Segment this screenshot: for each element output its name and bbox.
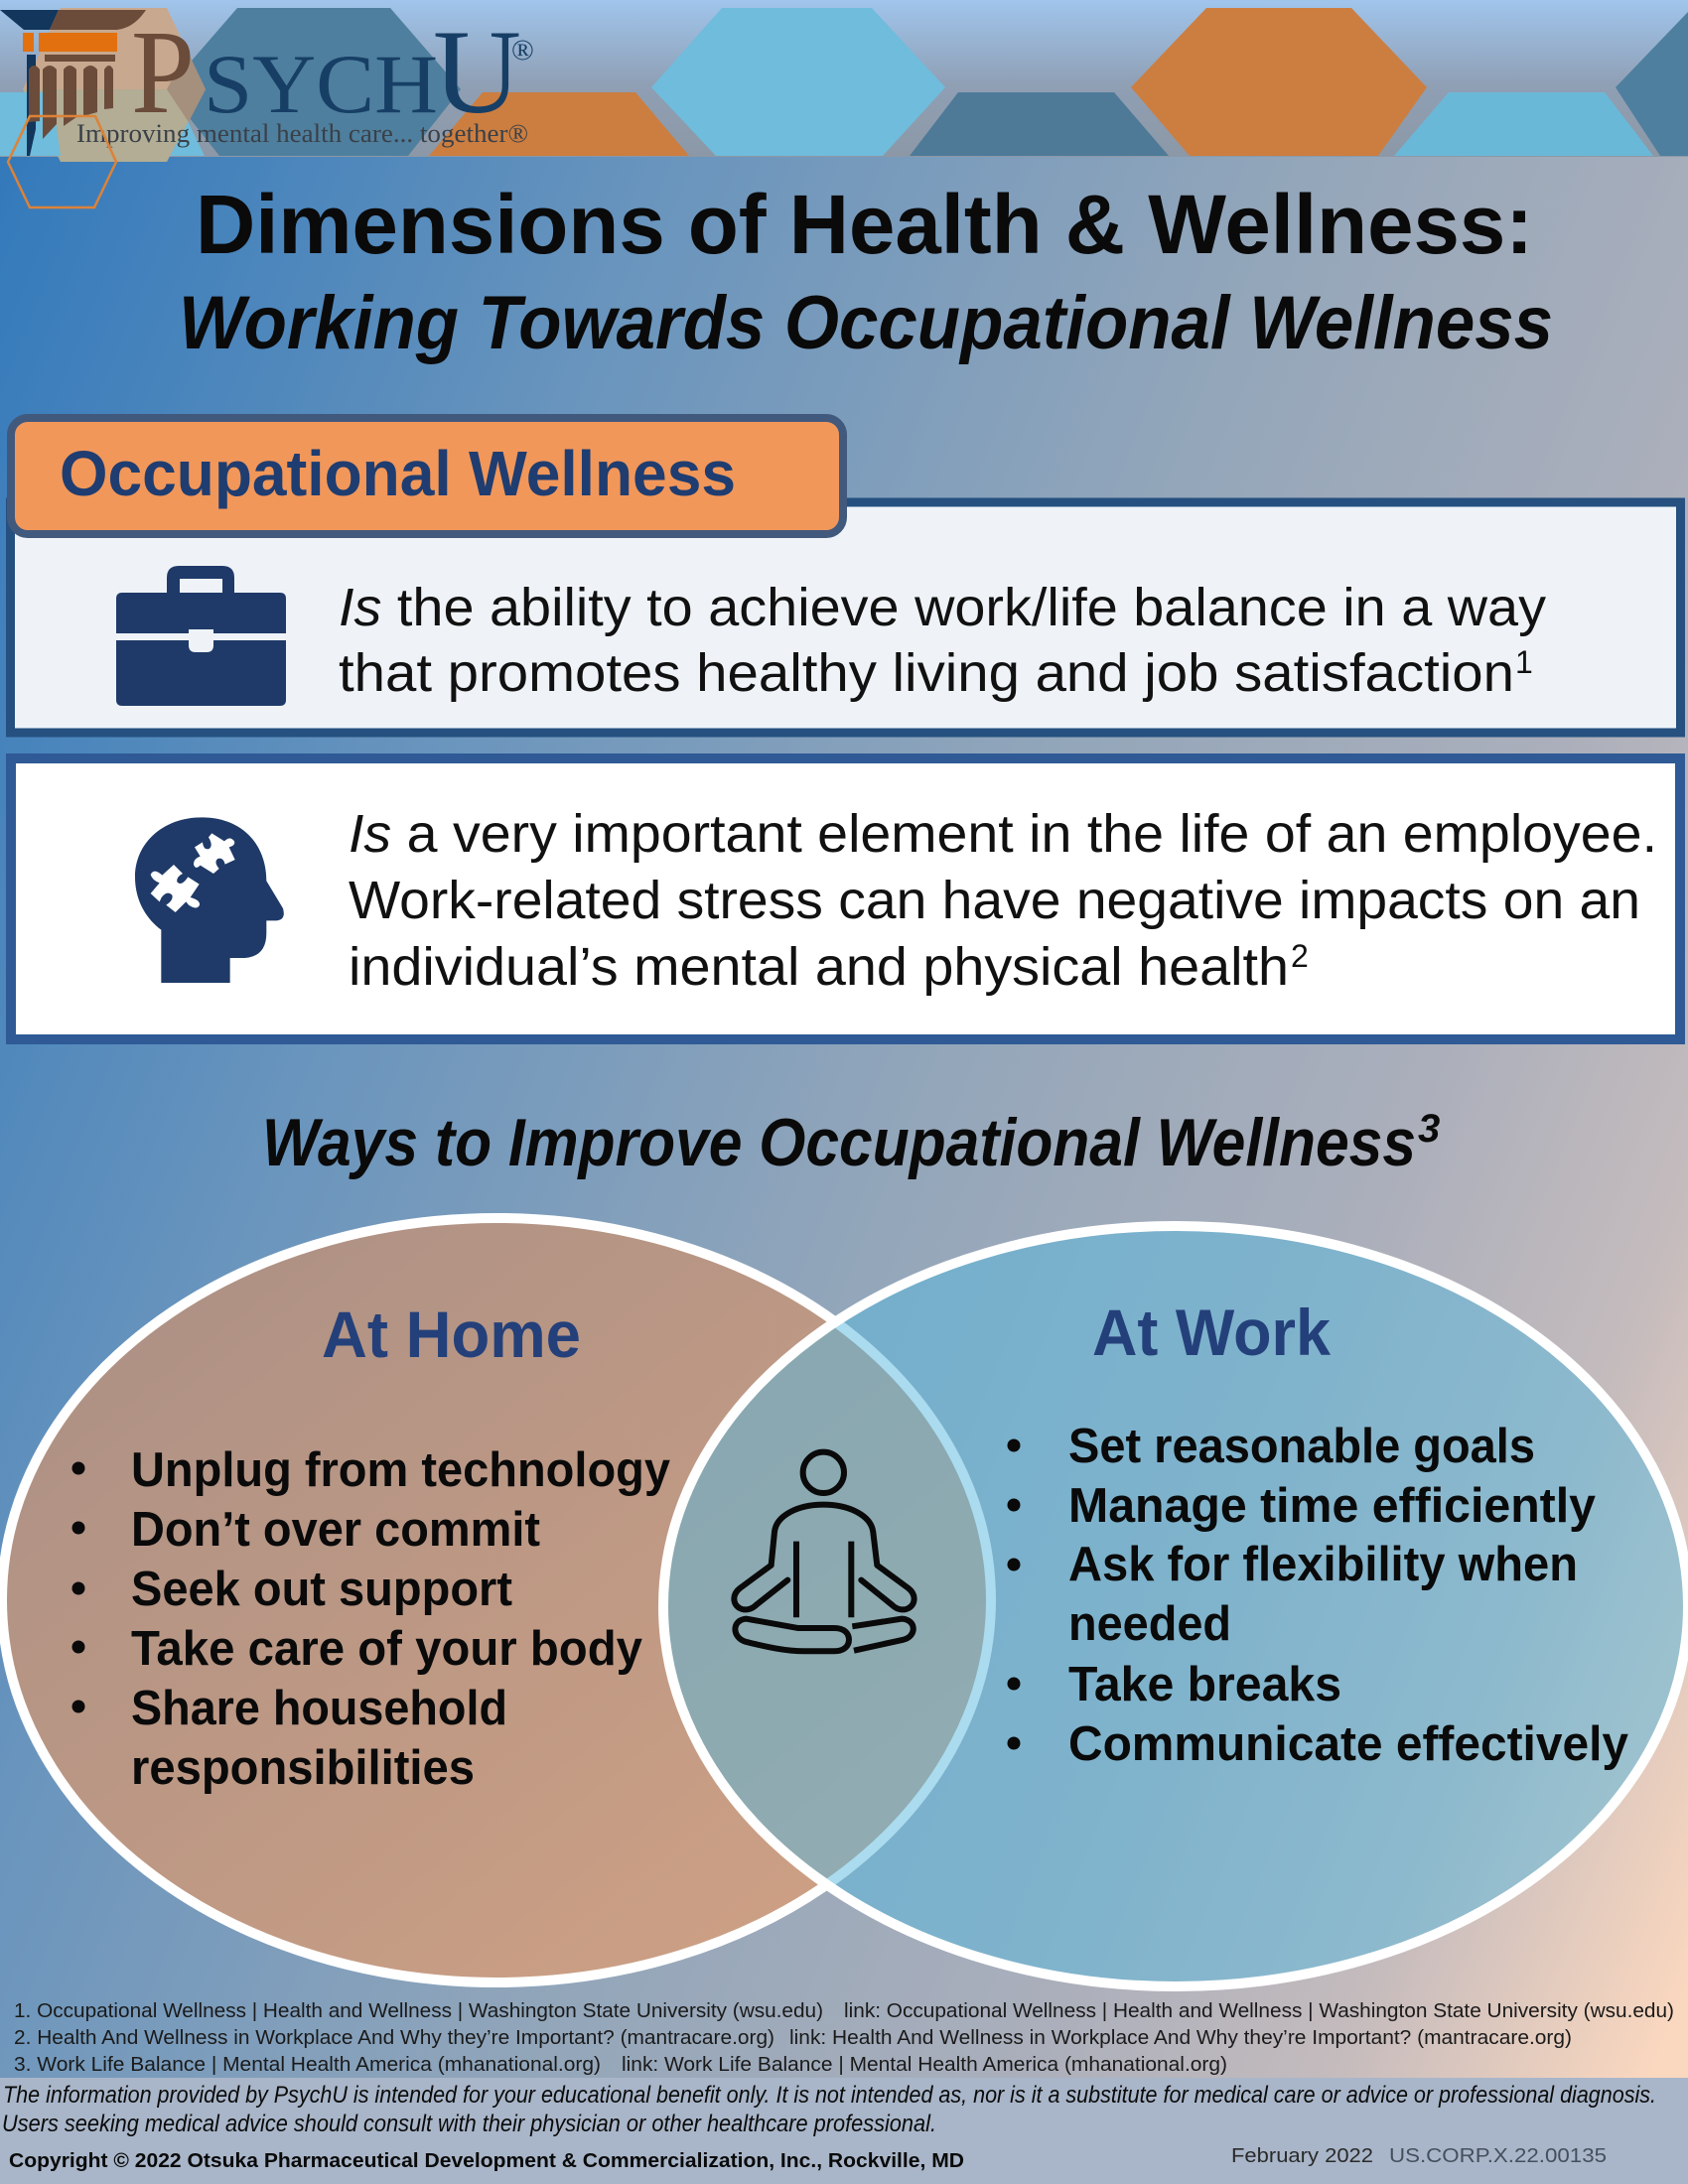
- puzzle piece lower: [151, 865, 200, 912]
- circle: at work: [663, 1226, 1688, 1986]
- list: at work: Set reasonable goals: [1068, 1420, 1535, 1473]
- text: definition 2: individual’s mental and physical health: [349, 937, 1289, 997]
- logo backing hexagon: [0, 8, 206, 162]
- heading: ways to improve: 3: [1418, 1107, 1440, 1151]
- list: at work: Communicate effectively: [1068, 1717, 1628, 1771]
- panel: definition 1: [10, 502, 1680, 733]
- footnotes: [14, 2000, 1674, 2076]
- footnotes: link: Health And Wellness in Workplace And Why they’re Important? (mantracare.org): [789, 2027, 1572, 2049]
- list: at home: Don’t over commit: [131, 1503, 540, 1557]
- list: at home: responsibilities: [131, 1741, 475, 1795]
- footnotes: link: Occupational Wellness | Health and Wellness | Washington State University (wsu.edu): [844, 2000, 1674, 2022]
- text: definition 2: 2: [1291, 938, 1309, 974]
- circle outline: at work: [663, 1226, 1688, 1986]
- list: at home: Unplug from technology: [131, 1443, 670, 1497]
- list: at work: Take breaks: [1068, 1658, 1341, 1711]
- logo: PsychU: [0, 6, 534, 162]
- logo letter U: U: [433, 6, 521, 139]
- footnotes: 2. Health And Wellness in Workplace And Why they’re Important? (mantracare.org): [14, 2027, 774, 2049]
- title: Dimensions of Health & Wellness:: [196, 178, 1533, 271]
- text: definition 1: that promotes healthy living and job satisfaction: [339, 643, 1514, 703]
- text: definition 1: 1: [1515, 644, 1533, 680]
- header banner with hexagons: [0, 0, 1688, 157]
- tab: Occupational Wellness: Occupational Wellness: [60, 438, 736, 509]
- logo letters SYCH: SYCH: [204, 38, 438, 131]
- list: at work: needed: [1068, 1597, 1231, 1651]
- disclaimer: [2, 2082, 1656, 2137]
- document code: US.CORP.X.22.00135: [1389, 2145, 1607, 2167]
- logo tagline: Improving mental health care... together®: [76, 119, 528, 148]
- disclaimer: Users seeking medical advice should consult with their physician or other healthcare professional.: [2, 2111, 936, 2137]
- icon: head with puzzle pieces: [135, 817, 284, 983]
- footnotes: 3. Work Life Balance | Mental Health America (mhanational.org): [14, 2054, 601, 2076]
- decorative orange hexagon outline: [8, 116, 116, 207]
- puzzle piece upper: [194, 833, 235, 874]
- footnotes: link: Work Life Balance | Mental Health America (mhanational.org): [622, 2054, 1227, 2076]
- logo column icon: [0, 10, 146, 156]
- date: February 2022: [1231, 2145, 1373, 2167]
- logo letter P: P: [131, 6, 195, 139]
- circle: at home: [2, 1218, 991, 1982]
- panel: definition 2: [11, 758, 1680, 1039]
- text: definition 2: [349, 804, 1657, 997]
- logo columns: [29, 66, 113, 139]
- icon: briefcase: [116, 566, 286, 706]
- text: definition 1: Is the ability to achieve work/life balance in a way: [339, 578, 1546, 637]
- icon: meditating person: [734, 1452, 914, 1651]
- heading: At Work: At Work: [1092, 1296, 1331, 1369]
- subtitle: Working Towards Occupational Wellness: [179, 281, 1553, 365]
- heading: At Home: At Home: [322, 1297, 581, 1371]
- list: at work: Ask for flexibility when: [1068, 1538, 1578, 1591]
- tab: Occupational Wellness: [11, 418, 843, 534]
- footnotes: 1. Occupational Wellness | Health and Wellness | Washington State University (wsu.edu): [14, 2000, 823, 2022]
- list: at home: Seek out support: [131, 1563, 512, 1616]
- footer band: [0, 2078, 1688, 2184]
- text: definition 2: Work-related stress can have negative impacts on an: [349, 871, 1640, 930]
- copyright: Copyright © 2022 Otsuka Pharmaceutical Development & Commercialization, Inc., Rockville, MD: [9, 2150, 964, 2172]
- list: at home: Take care of your body: [131, 1622, 642, 1676]
- list: at home: Share household: [131, 1682, 507, 1735]
- list: at work: Manage time efficiently: [1068, 1479, 1596, 1533]
- list: at work: [1007, 1420, 1628, 1771]
- logo registered mark: ®: [511, 34, 534, 67]
- text: definition 2: Is a very important element in the life of an employee.: [349, 804, 1657, 864]
- venn diagram: [2, 1218, 1688, 1986]
- list: at home: [71, 1443, 670, 1795]
- text: definition 1: [339, 578, 1546, 703]
- heading: ways to improve: Ways to Improve Occupational Wellness: [262, 1105, 1416, 1180]
